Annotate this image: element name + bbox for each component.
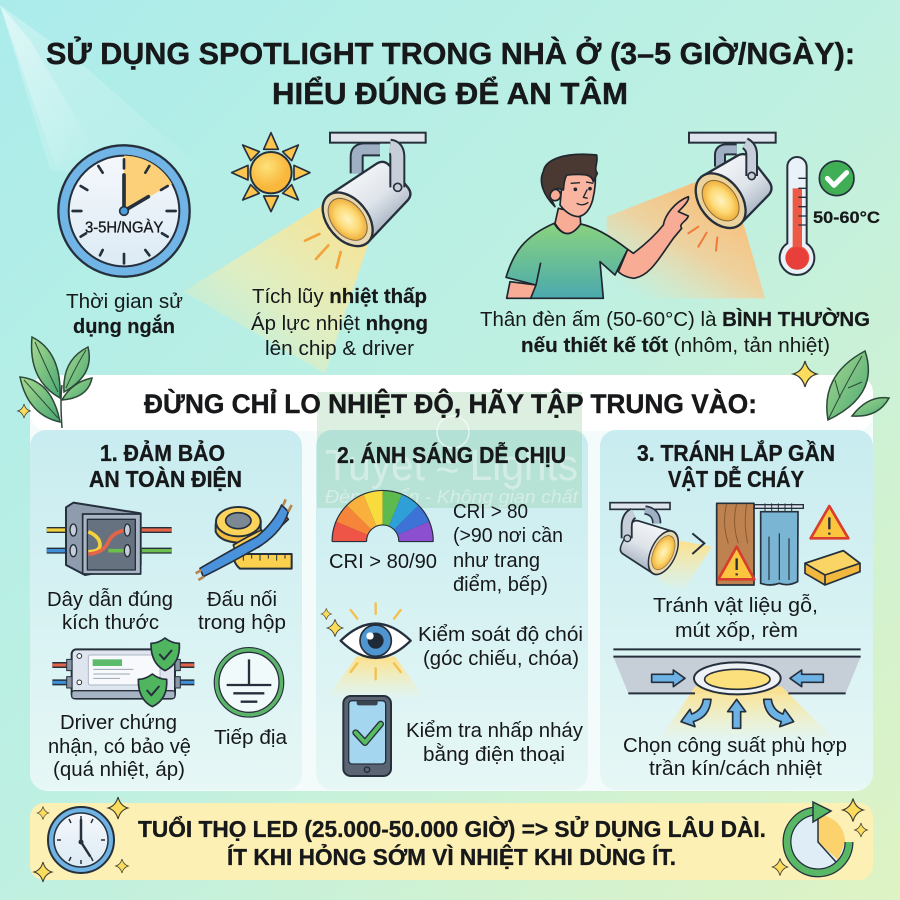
watermark — [317, 392, 582, 508]
text: banner: TUỔI THỌ LED (25.000-50.000 GIỜ) => SỬ DỤNG LÂU DÀI. — [138, 814, 766, 842]
icon: small green sparkle — [18, 404, 30, 418]
caption: dây dẫn: Dây dẫn đúng — [47, 588, 173, 611]
caption: tránh vật liệu: mút xốp, rèm — [675, 619, 798, 642]
watermark: Đèn chuẩn - Không gian chất — [325, 487, 579, 507]
caption: driver: (quá nhiệt, áp) — [53, 758, 185, 781]
panel: bottom banner — [30, 803, 873, 880]
caption: CRI > 80: như trang — [453, 549, 540, 572]
caption: thời gian sử dụng: dụng ngắn — [73, 314, 175, 338]
icon: right leaves and sparkle — [793, 351, 889, 420]
heading: card 1 — [89, 438, 242, 492]
caption: dây dẫn — [47, 588, 173, 634]
caption: driver — [48, 711, 191, 781]
caption: kiểm soát độ chói: (góc chiếu, chóa) — [423, 647, 579, 670]
caption: chọn công suất — [623, 734, 847, 780]
label: CRI > 80/90: CRI > 80/90 — [329, 550, 437, 573]
caption: thân đèn ấm: nếu thiết kế tốt (nhôm, tản nhiệt) — [521, 334, 830, 357]
caption: kiểm soát độ chói: Kiểm soát độ chói — [418, 623, 583, 646]
icon: green check badge — [819, 161, 854, 196]
caption: tránh vật liệu — [653, 594, 818, 642]
panel: focus section — [30, 375, 873, 791]
icon: spotlight with cool beam — [183, 133, 426, 373]
caption: tiếp địa: Tiếp địa — [214, 726, 288, 749]
title — [46, 35, 855, 111]
icon: person touching warm spotlight — [506, 154, 689, 298]
caption: thân đèn ấm: Thân đèn ấm (50-60°C) là BÌNH THƯỜNG — [480, 307, 870, 331]
heading: card 1: 1. ĐẢM BẢO — [100, 438, 225, 466]
icon: foam sponge — [805, 551, 860, 585]
label: 50-60°C: 50-60°C — [813, 208, 880, 227]
card 1 background — [30, 430, 302, 790]
icon: certified driver — [52, 638, 194, 707]
caption: CRI > 80: CRI > 80 — [453, 500, 528, 523]
icon: warm spotlight — [685, 133, 779, 251]
caption: kiểm tra nhấp nháy — [406, 719, 584, 766]
icon: phone with check — [343, 696, 391, 776]
icon: ground symbol — [214, 648, 284, 717]
icons: banner left sparkles — [34, 797, 128, 882]
caption: driver: nhận, có bảo vệ — [48, 735, 191, 758]
title: HIỂU ĐÚNG ĐỂ AN TÂM — [272, 75, 628, 111]
icon: warning triangle — [811, 506, 848, 538]
caption: tích lũy nhiệt thấp: Áp lực nhiệt nhọng — [251, 312, 428, 335]
caption: driver: Driver chứng — [60, 711, 177, 734]
card 3 background — [600, 430, 873, 790]
caption: CRI > 80: điểm, bếp) — [453, 573, 548, 596]
text: banner — [138, 814, 766, 870]
heading: card 1: AN TOÀN ĐIỆN — [89, 465, 242, 492]
heading: card 3: VẬT DỄ CHÁY — [668, 464, 804, 492]
warm light beam — [607, 182, 765, 298]
icon: clock 3-5h per day: 3-5H/NGÀY — [85, 217, 164, 236]
heading: card 2: 2. ÁNH SÁNG DỄ CHỊU — [337, 440, 566, 468]
caption: thời gian sử dụng — [66, 290, 183, 338]
caption: kiểm soát độ chói — [418, 623, 583, 670]
icon: banner recycle clock — [787, 802, 849, 873]
icon: recessed downlight with airflow — [613, 649, 861, 742]
icon: sun — [232, 133, 310, 212]
caption: tích lũy nhiệt thấp: lên chip & driver — [265, 337, 414, 360]
caption: tích lũy nhiệt thấp: Tích lũy nhiệt thấp — [252, 285, 427, 308]
icon: clock 3-5h per day — [58, 145, 190, 277]
icon: wood with warning — [717, 503, 754, 585]
caption: thân đèn ấm — [480, 307, 870, 357]
icon: left leaves — [20, 337, 92, 428]
caption: đấu nối — [198, 588, 286, 634]
watermark: Tuyet ≈ Lights — [325, 441, 578, 490]
icon: spotlight small — [610, 503, 712, 593]
caption: chọn công suất: Chọn công suất phù hợp — [623, 734, 847, 757]
caption: tránh vật liệu: Tránh vật liệu gỗ, — [653, 594, 818, 617]
caption: chọn công suất: trần kín/cách nhiệt — [649, 757, 822, 780]
caption: tích lũy nhiệt thấp — [251, 285, 428, 360]
caption: kiểm tra nhấp nháy: Kiểm tra nhấp nháy — [406, 719, 584, 742]
icon: eye with glare — [321, 603, 425, 698]
caption: kiểm tra nhấp nháy: bằng điện thoại — [423, 743, 565, 766]
icon: banner clock — [48, 807, 114, 873]
icon: junction box — [47, 503, 172, 575]
caption: dây dẫn: kích thước — [62, 611, 159, 634]
icon: chevron — [692, 533, 704, 554]
card 2 background — [316, 430, 588, 790]
heading: focus: ĐỪNG CHỈ LO NHIỆT ĐỘ, HÃY TẬP TRUNG VÀO: — [144, 387, 757, 419]
title: SỬ DỤNG SPOTLIGHT TRONG NHÀ Ở (3–5 GIỜ/NGÀY): — [46, 35, 855, 71]
icons: banner right sparkles — [772, 798, 867, 876]
caption: thời gian sử dụng: Thời gian sử — [66, 290, 183, 313]
caption: đấu nối: trong hộp — [198, 611, 286, 634]
icon: tape and wires — [196, 499, 292, 580]
light rays — [0, 5, 225, 190]
caption: CRI > 80 — [453, 500, 563, 596]
caption: đấu nối: Đấu nối — [207, 588, 277, 611]
icon: curtain — [754, 503, 803, 585]
heading: card 3: 3. TRÁNH LẮP GẦN — [637, 439, 835, 466]
caption: CRI > 80: (>90 nơi cần — [453, 524, 563, 547]
icon: CRI rainbow — [333, 491, 433, 541]
text: banner: ÍT KHI HỎNG SỚM VÌ NHIỆT KHI DÙNG ÍT. — [227, 842, 676, 870]
icon: thermometer — [780, 157, 814, 275]
heading: card 3 — [637, 439, 835, 492]
